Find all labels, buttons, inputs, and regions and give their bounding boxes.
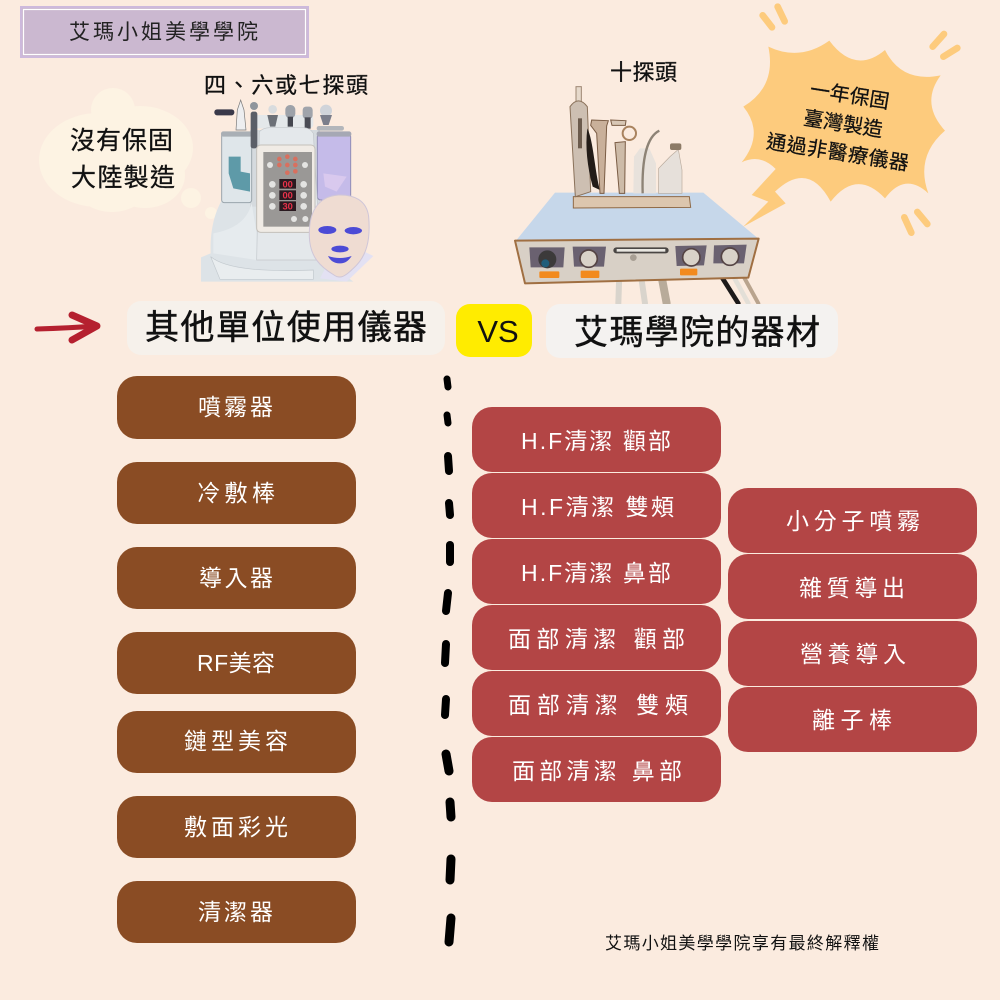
panel: Emma academy list column 1: 面部清潔 鼻部 — [512, 758, 682, 784]
panel: Emma academy list column 1: H.F清潔 雙頰 — [521, 494, 674, 520]
callout: thought cloud — [39, 88, 217, 219]
panel: other institutions list: 噴霧器 — [198, 394, 273, 420]
panel: Emma academy list column 2: 離子棒 — [812, 707, 892, 733]
panel: other institutions list: 導入器 — [199, 565, 273, 591]
callout: starburst: 通過非醫療儀器 — [765, 130, 910, 175]
caption: left machine: 四、六或七探頭 — [204, 73, 368, 98]
callout: starburst: 一年保固 — [808, 78, 891, 113]
panel: other institutions list: 冷敷棒 — [197, 480, 275, 506]
LED mask — [309, 195, 373, 282]
panel: other institutions list: 鏈型美容 — [184, 728, 288, 754]
probe stand — [573, 197, 691, 208]
centre body — [257, 128, 321, 260]
panel: Emma academy list column 2: 小分子噴霧 — [786, 508, 920, 534]
panel: Emma academy list column 1 — [472, 407, 721, 802]
arrow — [37, 315, 97, 340]
cables — [618, 270, 758, 303]
probes — [214, 100, 332, 148]
divider: dashed line — [445, 379, 451, 942]
icon: beauty machine with mask — [201, 100, 373, 282]
title — [21, 7, 308, 57]
top face — [516, 193, 758, 241]
panel: Emma academy list column 1: 面部清潔 顴部 — [508, 626, 685, 652]
panel: Emma academy list column 2 — [728, 488, 977, 752]
display strip — [613, 247, 669, 261]
callout: thought cloud: 沒有保固 — [70, 127, 173, 155]
panel: other institutions list — [117, 376, 356, 943]
left tank — [221, 131, 252, 203]
control panel — [257, 145, 315, 232]
callout: thought cloud: 大陸製造 — [71, 164, 175, 192]
panel: Emma academy list column 1: 面部清潔 雙頰 — [508, 692, 688, 718]
panel: Emma academy list column 1: H.F清潔 鼻部 — [521, 560, 671, 586]
orange switches — [539, 269, 697, 278]
panel: other institutions list: 敷面彩光 — [184, 814, 288, 840]
panel: other institutions list: 清潔器 — [198, 899, 273, 925]
icon: ten-probe machine — [515, 87, 759, 303]
callout: starburst: 臺灣製造 — [802, 107, 884, 142]
badge: VS — [456, 304, 532, 357]
sockets — [529, 245, 747, 268]
panel: other institutions list: RF美容 — [197, 650, 275, 676]
badge: VS: VS — [477, 314, 519, 349]
heading: other institutions: 其他單位使用儀器 — [145, 309, 427, 347]
panel: Emma academy list column 1: H.F清潔 顴部 — [521, 428, 671, 454]
heading: Emma academy: 艾瑪學院的器材 — [574, 314, 820, 352]
control panel: 00 — [282, 179, 293, 189]
panel: Emma academy list column 2: 雜質導出 — [799, 575, 905, 601]
caption: right machine: 十探頭 — [610, 60, 677, 85]
heading: other institutions — [127, 301, 445, 355]
front face — [515, 239, 759, 283]
footnote: 艾瑪小姐美學學院享有最終解釋權 — [605, 934, 879, 953]
panel: Emma academy list column 2: 營養導入 — [800, 641, 906, 667]
callout: starburst — [742, 7, 957, 233]
handles — [570, 87, 682, 197]
control panel: 30 — [282, 202, 293, 212]
right tank — [317, 126, 351, 200]
control panel: 00 — [282, 190, 293, 200]
title: 艾瑪小姐美學學院 — [69, 21, 258, 44]
heading: Emma academy — [546, 304, 838, 358]
